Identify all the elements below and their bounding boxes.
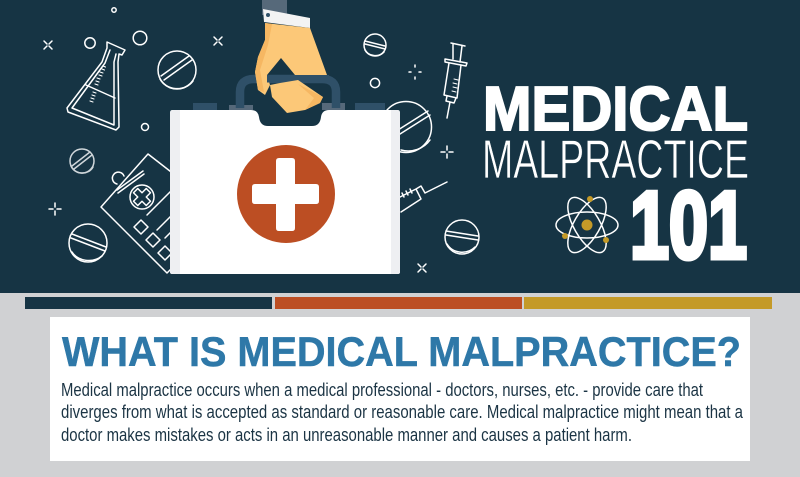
icon: upper syringe	[444, 43, 467, 118]
panel: what is medical malpractice	[50, 317, 750, 461]
heading: WHAT IS MEDICAL MALPRACTICE?	[62, 328, 741, 375]
red cross emblem	[237, 145, 335, 243]
icon: clipboard	[101, 154, 175, 273]
icon: flask	[67, 42, 125, 130]
body text: doctor makes mistakes or acts in an unreasonable manner and causes a patient harm.	[61, 425, 632, 445]
hand	[255, 23, 327, 95]
icon: briefcase	[170, 79, 400, 274]
case latches	[193, 103, 385, 110]
cuff	[263, 9, 310, 28]
header banner	[0, 0, 800, 293]
icon: pills	[69, 34, 479, 262]
colour divider bars	[25, 297, 772, 309]
title line: MEDICAL: MEDICAL	[483, 75, 748, 144]
sleeve	[262, 0, 287, 15]
icon: hand holding case	[255, 0, 329, 113]
case body	[170, 110, 400, 274]
fingers	[270, 80, 323, 113]
title	[482, 75, 749, 279]
icon: atom	[556, 192, 618, 258]
icon: lower syringe	[400, 182, 447, 212]
icon: sparkles	[44, 37, 453, 272]
case side strips	[170, 110, 400, 274]
body text	[61, 380, 744, 445]
hand shading	[255, 23, 272, 92]
icon: small circles	[85, 8, 380, 130]
case handle	[240, 79, 336, 108]
title line: 101: 101	[630, 172, 747, 279]
handle bar over palm	[267, 75, 329, 82]
